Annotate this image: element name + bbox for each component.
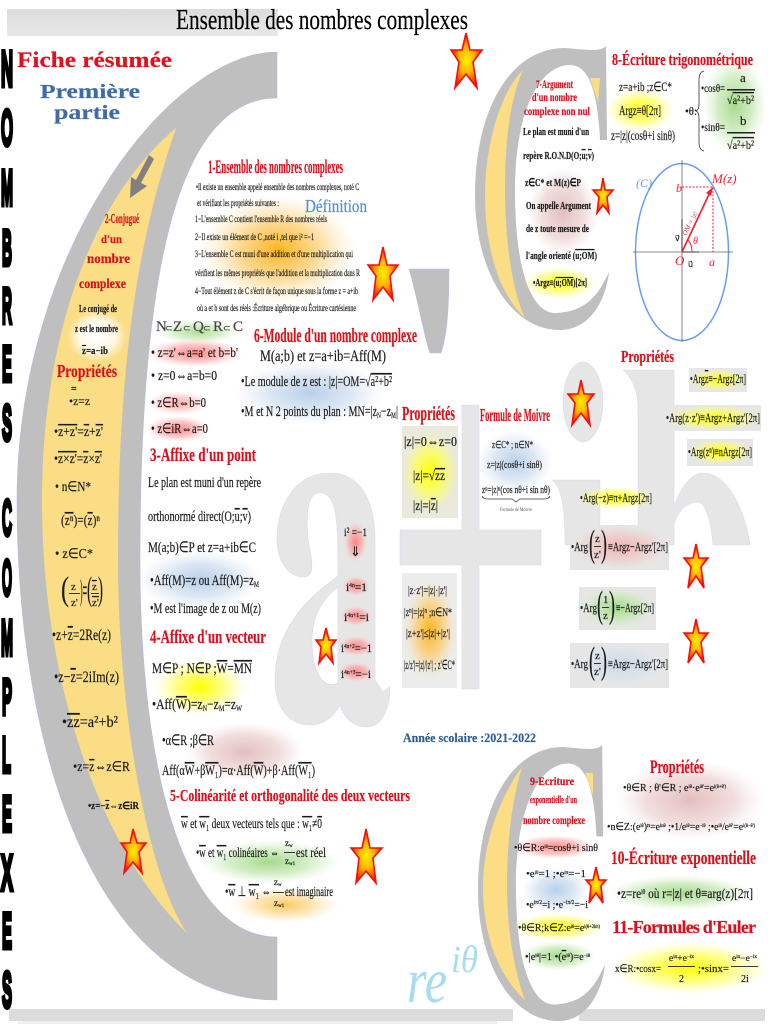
chart: unit circle [633, 160, 737, 342]
icon: star i dot [568, 380, 594, 425]
panel: exponentielle du nombre complexe: |=1 •( [539, 951, 562, 963]
panel: argument: z∈C* et M(z)∈P [525, 177, 581, 189]
panel: proprietes exponentielle: iθ' [729, 824, 733, 829]
panel: affixe d'un point: •Aff(M)=z ou Aff(M)=z [150, 573, 295, 589]
panel: puissances de i: 4n [349, 583, 355, 589]
panel: affixe d'un point: orthonormé direct(O;u;v) [148, 509, 251, 525]
panel: proprietes du module [402, 403, 458, 688]
panel: proprietes de l'argument: ( [589, 523, 595, 565]
panel: proprietes de l'argument: ( [597, 584, 603, 626]
panel: conjugue: •z=z⇔z∈R [73, 760, 131, 775]
chart: unit circle: b [676, 181, 682, 195]
text: P [2, 669, 12, 725]
panel: ecriture trigonometrique [611, 50, 755, 152]
text: R [2, 278, 12, 334]
text: Formule de Moivre [480, 405, 550, 425]
panel: puissances de i: i [341, 641, 344, 655]
school year: Année scolaire :2021-2022 [403, 730, 536, 745]
panel: proprietes de l'argument: z [603, 610, 608, 622]
panel: module d'un nombre complexe: M [391, 411, 396, 420]
panel: puissances de i [341, 525, 372, 681]
panel: colinearite et orthogonalite [170, 786, 410, 909]
panel: inclusions and equality: Q [193, 319, 204, 335]
panel: ensemble des nombres complexes: où a et b sont des réels :Écriture algébrique ou Écriture cartésienne [197, 303, 356, 313]
panel: exponentielle du nombre complexe: =−1 [568, 868, 586, 880]
panel: puissances de i: i² =−1 [344, 525, 367, 539]
text: M [1, 160, 13, 216]
text: S [2, 962, 12, 1018]
panel: conjugue: z' [71, 597, 78, 609]
panel: proprietes de l'argument: ≡Argz−Argz'[2π] [608, 656, 668, 671]
icon: star argument [593, 178, 613, 213]
panel: puissances de i: =−1 [355, 641, 372, 655]
panel: conjugue: z=a−ib [82, 346, 108, 357]
panel: proprietes exponentielle: iθ [640, 824, 644, 829]
panel: formules d'Euler: −ix [750, 955, 758, 960]
panel: argument: complexe non nul [524, 104, 590, 118]
panel: affixe d'un vecteur: −z [207, 697, 219, 713]
panel: ecriture trigonometrique: z=a+ib ;z∈C* [619, 79, 672, 94]
text: M [1, 610, 13, 666]
panel: affixe d'un vecteur: •α∈R ;β∈R [162, 733, 214, 749]
panel: ensemble des nombres complexes: 4−Tout élément z de C s'écrit de façon unique sous la forme z = a+ib [195, 286, 358, 296]
panel: proprietes de l'argument: ) [601, 523, 607, 565]
panel: affixe d'un point: 3-Affixe d'un point [150, 445, 256, 466]
chart: unit circle: θ [693, 236, 698, 247]
panel: proprietes exponentielle: Propriétés [650, 757, 704, 778]
panel: inclusions and equality: N [156, 319, 167, 335]
panel: ecriture exponentielle: iθ [641, 888, 646, 896]
panel: affixe d'un point: M [254, 580, 259, 589]
panel: inclusions and equality: • z∈iR⇔a=0 [151, 422, 208, 437]
panel: module d'un nombre complexe: −z [381, 404, 391, 420]
panel: inclusions and equality: • z=0⇔a=b=0 [151, 369, 217, 384]
C shape: argument [475, 46, 609, 330]
chart: unit circle: u⃗ [688, 260, 693, 269]
panel: proprietes exponentielle [607, 757, 755, 833]
panel: argument: •Argz≡(u;OM)[2π] [533, 278, 587, 289]
panel: ensemble des nombres complexes: et vérifiant les propriétés suivantes : [197, 198, 279, 208]
panel: exponentielle du nombre complexe: =1 ;•e [538, 868, 565, 880]
panel: formules d'Euler: x∈R:•cosx= [615, 963, 661, 975]
panel: conjugue: (zⁿ)=(z)ⁿ [61, 513, 100, 529]
panel: conjugue: Propriétés [57, 361, 117, 381]
panel: proprietes de l'argument: ) [601, 640, 607, 682]
panel: puissances de i: 4n+1 [347, 613, 359, 619]
icon: star arg 1 [684, 544, 708, 588]
panel: ensemble des nombres complexes: Définition [305, 196, 367, 216]
panel: exponentielle du nombre complexe: •e [526, 868, 535, 880]
panel: formule de Moivre: Formule de Moivre [500, 508, 533, 513]
panel: exponentielle du nombre complexe: iθ [544, 845, 548, 850]
stars [121, 33, 708, 903]
panel: argument: Le plan est muni d'un [523, 126, 589, 138]
text: N [1, 41, 13, 97]
panel: exponentielle du nombre complexe: nombre complexe [523, 813, 585, 827]
icon: star top [451, 33, 482, 88]
panel: argument: repère R.O.N.D(O;u;v) [523, 150, 594, 162]
panel: argument: 7-Argument [536, 77, 573, 91]
panel: conjugue: •zz=a²+b² [62, 714, 118, 731]
bottom strip [18, 1021, 497, 1024]
panel: conjugue: • z∈C* [55, 547, 93, 562]
panel: inclusions and equality: ⊂ [165, 323, 173, 333]
panel: inclusions and equality [151, 319, 243, 437]
panel: ecriture trigonometrique: b [740, 113, 746, 128]
text: 2-Conjugué [105, 212, 139, 227]
panel: ensemble des nombres complexes: vérifient les mêmes propriétés que l'addition et la multiplication dans R [195, 268, 360, 278]
panel: ensemble des nombres complexes: 2−Il existe un élément de C ,noté i ,tel que i² =−1 [195, 232, 314, 242]
panel: puissances de i: i [344, 610, 347, 624]
panel: affixe d'un vecteur: M∈P ; N∈P ;W=MN [152, 661, 252, 677]
panel: formule de Moivre: zⁿ=|z|ⁿ(cos nθ+i sin nθ) [482, 485, 550, 496]
panel: proprietes du module: |z·z'|=|z|·|z'| [408, 583, 447, 597]
panel: puissances de i: =1 [355, 580, 367, 594]
panel: proprietes exponentielle: i(θ+θ') [714, 785, 726, 790]
panel: module d'un nombre complexe: N [377, 411, 381, 420]
text: S [2, 395, 12, 451]
panel: module d'un nombre complexe: •M et N 2 points du plan : MN=|z [241, 404, 443, 420]
chart: unit circle: M(z) [711, 171, 737, 186]
heading: fiche resumee: Fiche résumée [17, 47, 172, 72]
panel: colinearite et orthogonalite: z [274, 898, 278, 908]
panel: proprietes de l'argument: z' [594, 666, 601, 678]
text: E [2, 903, 12, 959]
panel: conjugue: z est le nombre [75, 323, 118, 335]
panel: exponentielle du nombre complexe: i(θ+2kπ) [584, 925, 600, 930]
panel: proprietes du module: |z|=|z| [413, 499, 438, 514]
panel: ecriture trigonometrique: a [740, 70, 746, 85]
subheading: premiere partie: partie [54, 102, 120, 124]
panel: proprietes exponentielle: /e [722, 821, 729, 833]
panel: ecriture exponentielle: •z=re [617, 887, 647, 902]
header bar [7, 9, 278, 36]
panel: affixe d'un vecteur: W [236, 704, 242, 713]
panel: proprietes du module: |z+z'|≤|z|+|z'| [406, 626, 450, 640]
panel: puissances de i: =i [359, 610, 370, 624]
icon: star exponentielle [586, 867, 606, 903]
panel: exponentielle du nombre complexe: e [562, 951, 566, 963]
panel: exponentielle du nombre complexe: 9-Ecriture [530, 774, 575, 788]
panel: conjugue: •z=z [69, 394, 90, 408]
chart: unit circle: a [709, 255, 715, 269]
panel: proprietes exponentielle: ;•1/e [666, 821, 686, 833]
text: B [2, 220, 12, 276]
panel: exponentielle du nombre complexe: exponentielle d'un [530, 794, 577, 806]
panel: proprietes exponentielle: )ⁿ=e [644, 821, 660, 833]
panel: ensemble des nombres complexes [195, 157, 367, 313]
panel: formules d'Euler: −e [740, 953, 750, 963]
panel: formule de Moivre: z∈C* ; n∈N* [492, 440, 533, 451]
panel: affixe d'un vecteur: =z [224, 697, 236, 713]
chart: unit circle: (C) [636, 176, 652, 190]
icon: star arg 2 [684, 619, 708, 663]
panel: exponentielle du nombre complexe [514, 774, 600, 963]
panel: affixe d'un vecteur: N [203, 704, 207, 713]
panel: ensemble des nombres complexes: 3−L'ensemble C est muni d'une addition et d'une multiplication qui [195, 249, 353, 259]
panel: argument: d'un nombre [532, 90, 577, 104]
icon: star left [121, 829, 146, 873]
panel: inclusions and equality: ⊂ [223, 323, 231, 333]
panel: conjugue: ( [87, 571, 92, 608]
text: L [2, 727, 11, 783]
panel: exponentielle du nombre complexe: •θ∈R:e [514, 842, 548, 854]
panel: affixe d'un vecteur: •Aff(W)=z [152, 697, 207, 713]
panel: puissances de i: 4n+3 [344, 670, 355, 676]
panel: inclusions and equality: • z=z'⇔a=a' et b=b' [151, 346, 238, 361]
panel: affixe d'un vecteur [150, 627, 315, 779]
C shape: exponentielle [478, 745, 605, 1021]
panel: conjugue: z [71, 581, 76, 593]
panel: ensemble des nombres complexes: 1-Ensemble des nombres complexes [208, 157, 343, 178]
panel: puissances de i: i [346, 580, 349, 594]
panel: inclusions and equality: R [213, 319, 223, 335]
panel: proprietes exponentielle: inθ [660, 824, 666, 829]
panel: affixe d'un point [148, 445, 261, 617]
letter a [275, 473, 390, 727]
panel: argument: On appelle Argument [526, 200, 591, 212]
panel: affixe d'un vecteur: M [219, 704, 224, 713]
letter i dot [563, 362, 603, 442]
panel: exponentielle du nombre complexe: =cosθ+i sinθ [548, 842, 598, 854]
panel: colinearite et orthogonalite: w [278, 883, 282, 888]
panel: conjugue: z [92, 581, 97, 593]
panel: module d'un nombre complexe [241, 325, 417, 420]
panel: colinearite et orthogonalite: z [285, 856, 289, 866]
panel: exponentielle du nombre complexe: •|e [525, 951, 536, 963]
panel: proprietes du module: |z|=√zz [413, 469, 445, 484]
panel: proprietes de l'argument: ( [589, 640, 595, 682]
panel: proprietes de l'argument: •Arg(−z)≡π+Argz[2π] [580, 490, 652, 505]
text: O [2, 550, 12, 606]
panel: proprietes exponentielle: =e [690, 821, 700, 833]
panel: conjugue [52, 212, 140, 812]
panel: formules d'Euler: 2i [741, 974, 749, 985]
panel: formule de Moivre: z=|z|(cosθ+i sinθ) [487, 460, 542, 471]
panel: formules d'Euler: −ix [687, 955, 695, 960]
panel: exponentielle du nombre complexe: iθ [566, 954, 570, 959]
panel: inclusions and equality: • z∈R⇔b=0 [151, 396, 206, 411]
formula: r e i theta [407, 939, 478, 1016]
panel: proprietes exponentielle: −iθ [700, 824, 706, 829]
panel: proprietes de l'argument: ) [609, 584, 615, 626]
panel: ecriture trigonometrique: Argz≡θ[2π] [619, 104, 661, 119]
panel: proprietes exponentielle: i(θ−θ') [743, 824, 755, 829]
icon: star definition [368, 247, 398, 300]
panel: formule de Moivre [480, 405, 550, 513]
icon: star letter a [316, 628, 336, 663]
panel: proprietes exponentielle: =e [704, 782, 714, 794]
panel: conjugue: •z=−z⇔z∈iR [88, 801, 140, 812]
wedge shape [409, 269, 449, 353]
chart: unit circle: OM = |z| [681, 210, 699, 237]
panel: colinearite et orthogonalite: w1 [278, 904, 285, 909]
panel: affixe d'un point: M(a;b)∈P et z=a+ib∈C [148, 540, 256, 556]
panel: ecriture trigonometrique: z=|z|(cosθ+i sinθ) [611, 129, 675, 144]
large letter C [17, 52, 277, 1000]
panel: proprietes de l'argument: •Arg [580, 600, 597, 615]
panel: proprietes de l'argument: •Arg [571, 539, 588, 554]
panel: proprietes de l'argument: 1 [603, 594, 608, 606]
vertical title: nombres complexes [1, 41, 13, 1018]
glow highlights [138, 55, 768, 994]
panel: inclusions and equality: Z [173, 319, 182, 335]
panel: puissances de i: =−i [355, 667, 372, 681]
bottom bar right [579, 1009, 765, 1021]
panel: conjugue: )= [80, 574, 87, 607]
panel: ecriture trigonometrique: •cosθ= [701, 81, 725, 95]
panel: conjugue: complexe [79, 277, 126, 292]
panel: affixe d'un vecteur: 4-Affixe d'un vecteur [150, 627, 266, 648]
panel: conjugue: • n∈N* [55, 480, 91, 495]
panel: ecriture trigonometrique: •sinθ= [701, 120, 725, 134]
text: E [2, 786, 12, 842]
panel: inclusions and equality: ⊂ [183, 323, 191, 333]
panel: conjugue: •z+z=2Re(z) [52, 627, 111, 644]
panel: proprietes exponentielle: iθ [686, 824, 690, 829]
panel: proprietes de l'argument: z [595, 533, 600, 545]
icon: grey arrow [130, 155, 154, 198]
title: Ensemble des nombres complexes [176, 5, 468, 36]
panel: exponentielle du nombre complexe: =e [574, 922, 584, 934]
panel: proprietes exponentielle: ;•e [706, 821, 719, 833]
text: X [1, 845, 13, 901]
panel: module d'un nombre complexe: | [396, 404, 398, 420]
letter i stem [552, 480, 600, 545]
panel: proprietes exponentielle: ·e [692, 782, 700, 794]
panel: ecriture trigonometrique: √a²+b² [727, 138, 754, 152]
panel: argument: l'angle orienté (u;OM) [526, 250, 597, 262]
panel: proprietes du module: |z|=0⇔z=0 [404, 435, 457, 450]
panel: module d'un nombre complexe: •Le module de z est : |z|=OM=√a²+b² [241, 374, 392, 390]
panel: exponentielle du nombre complexe: =−i [574, 899, 588, 911]
panel: puissances de i: i [341, 667, 344, 681]
panel: colinearite et orthogonalite: z [274, 877, 278, 887]
panel: conjugue: Le conjugé de [79, 303, 117, 315]
panel: affixe d'un point: •M est l'image de z ou M(z) [150, 601, 261, 617]
subheading: premiere partie: Première [40, 81, 140, 103]
text: E [2, 336, 12, 392]
panel: colinearite et orthogonalite: •w ⊥ w₁ ⇔ [225, 885, 271, 900]
panel: conjugue: = [71, 384, 77, 395]
panel: colinearite et orthogonalite: •w et w₁ colinéaires ⇔ [196, 846, 279, 861]
panel: conjugue: z' [92, 597, 99, 609]
panel: affixe d'un vecteur: Aff(αW+βW₁)=α·Aff(W)+β·Aff(W₁) [162, 763, 315, 779]
panel: exponentielle du nombre complexe: •e [526, 899, 535, 911]
plus sign [400, 405, 541, 689]
panel: colinearite et orthogonalite: est imaginaire [285, 885, 333, 900]
panel: exponentielle du nombre complexe: −iπ/2 [563, 900, 574, 906]
panel: exponentielle du nombre complexe: i0 [535, 871, 539, 876]
panel: module d'un nombre complexe: M(a;b) et z=a+ib=Aff(M) [260, 348, 386, 365]
panel: proprietes exponentielle: •θ∈R ; θ'∈R ; e [623, 782, 695, 794]
panel: proprietes du module: |z/z'|=|z|/|z'| ; z'∈C* [404, 657, 455, 672]
panel: colinearite et orthogonalite: est réel [296, 846, 326, 861]
panel: conjugue: ( [61, 571, 69, 608]
panel: affixe d'un point: Le plan est muni d'un repère [148, 475, 261, 491]
letter h [623, 370, 750, 545]
panel: argument: de z toute mesure de [526, 223, 589, 235]
panel: colinearite et orthogonalite: w et w₁ deux vecteurs tels que : w₁≠0 [181, 817, 322, 832]
panel: conjugue: ) [98, 571, 103, 608]
panel: exponentielle du nombre complexe: iθ [571, 925, 575, 930]
panel: formules d'Euler: e [669, 953, 673, 963]
panel: conjugue: d'un [101, 232, 122, 246]
panel: exponentielle du nombre complexe: =i ;•e [542, 899, 563, 911]
panel: proprietes de l'argument: ≡Argz−Argz'[2π] [608, 539, 668, 554]
panel: proprietes exponentielle: iθ [688, 785, 692, 790]
panel: colinearite et orthogonalite: 5-Colinéarité et orthogonalité des deux vecteurs [170, 786, 410, 805]
panel: proprietes du module: Propriétés [402, 403, 455, 425]
panel: exponentielle du nombre complexe: iθ [535, 954, 539, 959]
panel: ecriture exponentielle [611, 847, 756, 902]
panel: proprietes de l'argument: Propriétés [621, 347, 674, 366]
panel: proprietes de l'argument: z [595, 650, 600, 662]
panel: formules d'Euler [612, 917, 758, 985]
panel: proprietes de l'argument: z' [594, 549, 601, 561]
panel: proprietes de l'argument [570, 347, 761, 688]
subheading: premiere partie [40, 81, 140, 124]
panel: ensemble des nombres complexes: •Il existe un ensemble appelé ensemble des nombres complexes, noté C [196, 182, 359, 192]
panel: colinearite et orthogonalite: z [285, 838, 289, 848]
panel: inclusions and equality: ⊂ [203, 323, 211, 333]
chart: unit circle: v⃗ [675, 234, 680, 243]
panel: puissances de i: 4n+2 [344, 644, 355, 650]
formula: r e i theta: re [407, 945, 447, 1016]
panel: proprietes exponentielle: iθ' [700, 785, 704, 790]
panel: exponentielle du nombre complexe: •θ∈R;k∈Z:e [518, 922, 577, 934]
panel: conjugue: •z×z'=z×z' [54, 452, 102, 467]
panel: argument [523, 77, 597, 289]
panel: module d'un nombre complexe: 6-Module d'un nombre complexe [254, 325, 417, 347]
panel: formules d'Euler: +e [677, 953, 687, 963]
panel: proprietes exponentielle: •n∈Z:(e [607, 821, 644, 833]
panel: formules d'Euler: 2 [679, 974, 684, 985]
text: O [1, 100, 13, 156]
icon: star colinearite [351, 829, 382, 883]
panel: inclusions and equality: C [233, 319, 243, 335]
panel: colinearite et orthogonalite: w [289, 844, 293, 849]
panel: exponentielle du nombre complexe: iπ/2 [534, 900, 542, 906]
panel: formules d'Euler: 11-Formules d'Euler [612, 917, 756, 937]
panel: proprietes exponentielle: iθ [719, 824, 722, 829]
panel: conjugue: nombre [87, 252, 130, 267]
bottom bar left [9, 1009, 513, 1021]
panel: proprietes de l'argument: •Arg [571, 656, 588, 671]
panel: formules d'Euler: e [732, 953, 736, 963]
panel: formules d'Euler: ;•sinx= [698, 963, 729, 975]
panel: ecriture trigonometrique: •θ: [685, 104, 697, 118]
panel: formules d'Euler: ix [673, 955, 678, 960]
panel: proprietes du module: |zⁿ|=|z|ⁿ ;n∈N* [404, 605, 452, 619]
panel: colinearite et orthogonalite: w1 [289, 862, 296, 867]
panel: proprietes exponentielle: =e [733, 821, 743, 833]
panel: conjugue: •z+z'=z+z' [54, 425, 103, 440]
panel: conjugue: •z−z=2iIm(z) [54, 669, 119, 686]
panel: ensemble des nombres complexes: 1−L'ensemble C contient l'ensemble R des nombres réels [195, 214, 327, 224]
panel: exponentielle du nombre complexe: −iθ [584, 954, 591, 959]
chart: unit circle: O [675, 253, 685, 268]
panel: puissances de i: ⇓ [350, 544, 361, 559]
text: C [2, 490, 12, 546]
panel: ecriture trigonometrique: √a²+b² [727, 93, 754, 107]
panel: formules d'Euler: ix [736, 955, 741, 960]
panel: exponentielle du nombre complexe: iπ [564, 871, 569, 876]
panel: exponentielle du nombre complexe: )=e [570, 951, 584, 963]
formula: r e i theta: iθ [451, 939, 478, 981]
panel: proprietes de l'argument: ≡−Argz[2π] [616, 600, 654, 615]
